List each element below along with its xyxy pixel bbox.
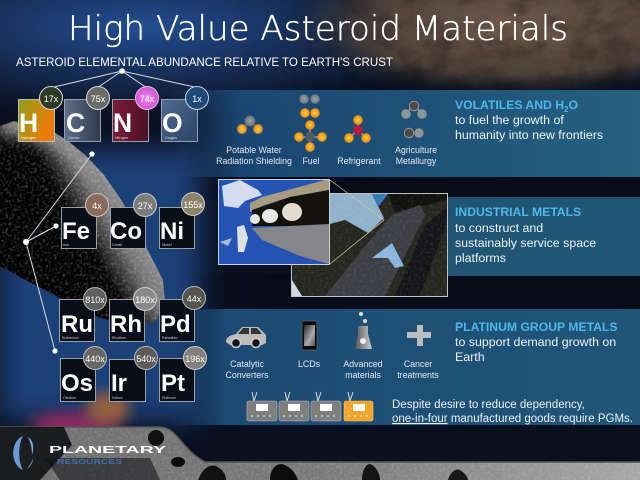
tile: rhodium: Rhodium xyxy=(112,336,126,340)
tile: ruthenium: Ru xyxy=(61,311,93,338)
tile: nickel: Nickel xyxy=(162,243,172,247)
panel: platinum group metals band xyxy=(170,309,640,425)
badge: 440x xyxy=(84,346,106,370)
PGM use labels xyxy=(225,359,439,380)
PGM use labels: LCDs xyxy=(298,359,321,369)
tile: oxygen xyxy=(162,100,198,142)
tile: nitrogen xyxy=(112,100,148,142)
text: volatiles: to fuel the growth of xyxy=(455,113,564,127)
PGM use labels: Converters xyxy=(225,370,269,380)
badge: 27x: 27x xyxy=(138,201,153,211)
tile: nickel xyxy=(160,208,194,248)
molecule labels: Fuel xyxy=(302,156,320,166)
tile: cobalt: Co xyxy=(110,218,142,245)
tile: iridium: Ir xyxy=(111,370,127,397)
badge: 155x xyxy=(182,192,204,216)
tile: cobalt xyxy=(110,208,146,248)
badge: 74x: 74x xyxy=(140,94,155,104)
tile: osmium xyxy=(60,358,96,402)
tile: carbon xyxy=(64,100,100,142)
icon: refrigerant molecule xyxy=(344,115,371,143)
logo: RESOURCES xyxy=(57,457,122,466)
text: industrial metals: platforms xyxy=(455,251,506,265)
tile: palladium: Pd xyxy=(160,311,191,338)
badge: 17x xyxy=(40,86,62,110)
zoom callout lines xyxy=(330,180,384,264)
PGM use labels: Catalytic xyxy=(230,359,264,369)
badge: 17x: 17x xyxy=(44,94,59,104)
tile: palladium xyxy=(160,300,194,342)
badge: 44x xyxy=(182,286,206,310)
tile: carbon: Carbon xyxy=(68,136,80,140)
tile: osmium: Os xyxy=(61,370,93,397)
text: dependency note: Despite desire to reduce dependency, xyxy=(392,399,585,411)
tile: hydrogen xyxy=(18,100,54,142)
badge: 74x xyxy=(136,86,158,110)
tile: oxygen: O xyxy=(162,108,183,138)
text: platinum group metals: to support demand growth on xyxy=(455,335,616,349)
badge: 196x: 196x xyxy=(185,354,205,364)
text: dependency note: one-in-four manufactured goods require PGMs. xyxy=(392,413,633,425)
text: platinum group metals: Earth xyxy=(455,350,485,364)
badge: 180x: 180x xyxy=(135,295,155,305)
text: volatiles: VOLATILES AND H xyxy=(455,98,564,112)
icon: agriculture molecules xyxy=(401,101,427,138)
molecule labels: Agriculture xyxy=(395,145,437,155)
tile: iron: Fe xyxy=(62,218,90,245)
tile: hydrogen: Hydrogen xyxy=(21,136,36,140)
icon: fuel molecules xyxy=(294,94,327,152)
badge: 810x xyxy=(84,288,106,310)
badge: 1x: 1x xyxy=(192,94,202,104)
tile: platinum: Pt xyxy=(161,370,185,397)
text: industrial metals: INDUSTRIAL METALS xyxy=(455,205,581,219)
text: industrial metals xyxy=(455,205,596,265)
icon: phone xyxy=(302,321,317,350)
connector: metals xyxy=(23,151,95,354)
asteroid xyxy=(0,115,170,330)
tile: nitrogen: N xyxy=(113,108,132,138)
icon: water molecule xyxy=(237,116,263,134)
PGM use labels: treatments xyxy=(397,370,439,380)
badge: 4x: 4x xyxy=(92,201,102,211)
panel: industrial metals band xyxy=(448,197,640,276)
badge: 44x: 44x xyxy=(187,294,202,304)
connector: volatiles xyxy=(50,68,199,88)
badge: 540x: 540x xyxy=(136,354,156,364)
tile: palladium: Palladium xyxy=(162,336,177,340)
text: platinum group metals: PLATINUM GROUP METALS xyxy=(455,320,618,334)
tile: rhodium: Rh xyxy=(110,311,142,338)
tile: cobalt: Cobalt xyxy=(112,243,122,247)
logo xyxy=(13,436,166,470)
badge: 155x: 155x xyxy=(183,200,203,210)
tile: iron xyxy=(62,208,96,248)
tile: nickel: Ni xyxy=(160,218,184,245)
badge: 196x xyxy=(184,346,206,370)
text: industrial metals: sustainably service space xyxy=(455,236,596,250)
footer rock strip xyxy=(0,427,640,480)
molecule labels xyxy=(216,145,437,166)
icon: flask xyxy=(355,312,372,349)
badge: 810x: 810x xyxy=(85,295,105,305)
badge: 180x xyxy=(134,288,156,310)
tile: oxygen: Oxygen xyxy=(165,136,177,140)
text: volatiles: humanity into new frontiers xyxy=(455,128,603,142)
panel: volatiles band xyxy=(170,90,640,177)
text: platinum group metals xyxy=(455,320,618,364)
PGM use labels: Cancer xyxy=(404,359,432,369)
badge: 4x xyxy=(86,194,108,216)
tile: platinum xyxy=(160,358,194,402)
tile: nitrogen: Nitrogen xyxy=(115,136,128,140)
photo: station detail xyxy=(292,194,448,296)
badge: 540x xyxy=(134,346,158,370)
icon: car xyxy=(226,327,266,348)
text: volatiles: 2 xyxy=(564,105,569,114)
tile: iridium: Iridium xyxy=(112,396,123,400)
badge: 27x xyxy=(134,194,156,216)
tile: hydrogen: H xyxy=(19,108,38,138)
PGM use labels: materials xyxy=(345,370,381,380)
tile: ruthenium xyxy=(60,300,94,342)
tile: iron: Iron xyxy=(63,243,69,247)
badge: 440x: 440x xyxy=(85,354,105,364)
tile: ruthenium: Ruthenium xyxy=(62,336,79,340)
tile: carbon: C xyxy=(66,108,85,138)
title: High Value Asteroid Materials xyxy=(68,9,568,49)
text: industrial metals: to construct and xyxy=(455,221,543,235)
molecule labels: Radiation Shielding xyxy=(216,156,292,166)
molecule labels: Metallurgy xyxy=(396,156,437,166)
text: volatiles xyxy=(455,98,603,142)
molecule labels: Potable Water xyxy=(226,145,282,155)
tile: osmium: Osmium xyxy=(63,396,76,400)
subtitle: ASTEROID ELEMENTAL ABUNDANCE RELATIVE TO EARTH'S CRUST xyxy=(16,57,393,69)
badge: 75x xyxy=(86,86,110,110)
badge: 1x xyxy=(186,86,208,110)
tile: platinum: Platinum xyxy=(162,396,176,400)
badge: 75x: 75x xyxy=(91,94,106,104)
PGM use labels: Advanced xyxy=(343,359,383,369)
tile: iridium xyxy=(110,360,146,402)
text: dependency note xyxy=(392,399,633,425)
icon: plus xyxy=(407,325,431,346)
photo: spacewalk xyxy=(218,179,330,264)
logo: PLANETARY xyxy=(49,444,166,456)
molecule labels: Refrigerant xyxy=(337,156,381,166)
icon row: goods xyxy=(247,392,373,421)
text: volatiles: O xyxy=(568,98,578,112)
tile: rhodium xyxy=(110,300,144,342)
